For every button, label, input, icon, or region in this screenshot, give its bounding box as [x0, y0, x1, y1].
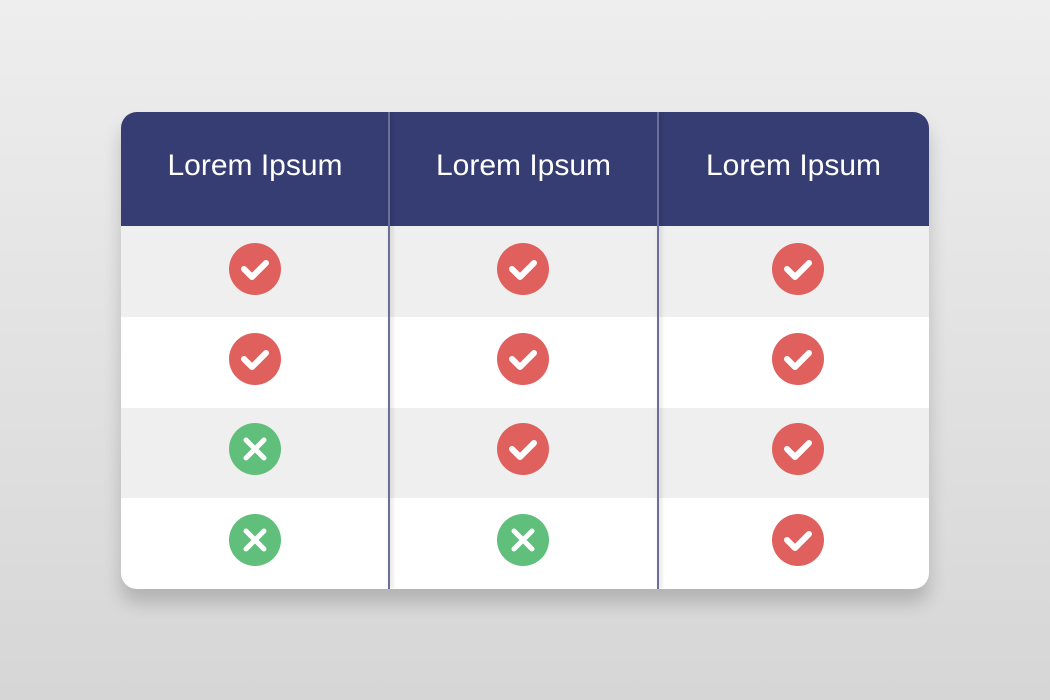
header: column 1: Lorem Ipsum — [167, 149, 343, 182]
column 1 icons — [229, 243, 281, 566]
table — [121, 112, 929, 589]
header: column 3: Lorem Ipsum — [706, 149, 881, 182]
column 2 icons — [497, 243, 549, 566]
header: column 2: Lorem Ipsum — [436, 149, 611, 182]
icons grid — [229, 243, 824, 566]
header bar — [121, 112, 929, 226]
column 3 icons — [772, 243, 824, 566]
row backgrounds — [121, 226, 929, 317]
